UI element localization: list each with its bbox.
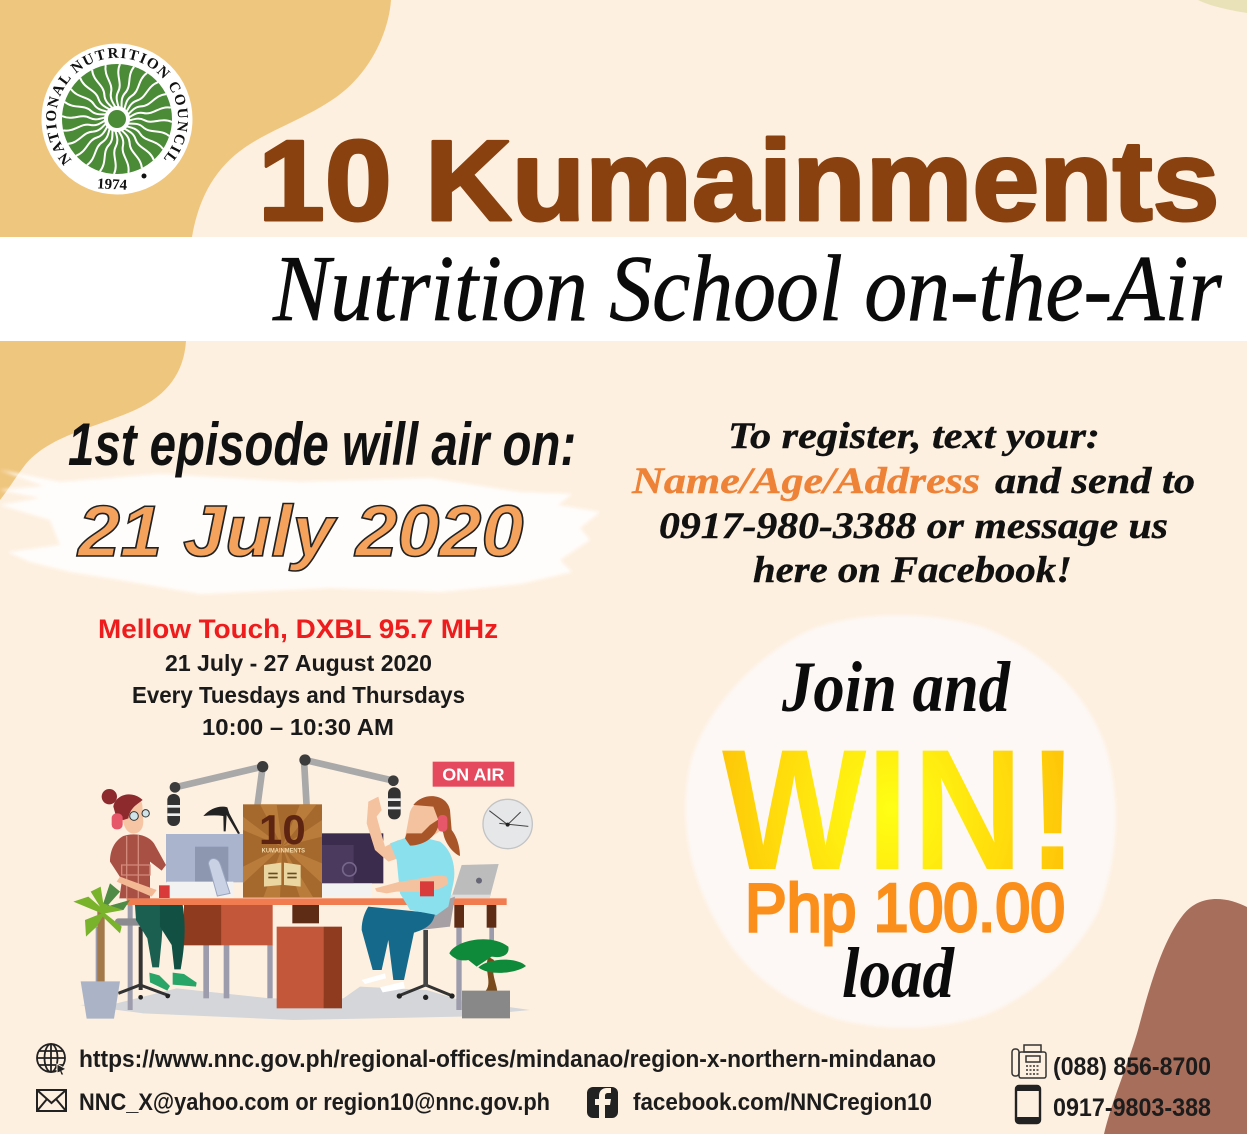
laptop — [427, 864, 499, 898]
text: load: load — [842, 933, 955, 1013]
right microphone — [299, 754, 401, 819]
icon: globe — [37, 1044, 66, 1075]
schedule text block: 21 July - 27 August 2020 — [165, 650, 432, 676]
registration instructions: Name/Age/Address — [631, 461, 980, 502]
text: WIN!: N — [912, 714, 1023, 906]
mobile number: 0917-9803-388 — [1053, 1094, 1211, 1122]
shape: top-right corner tint — [1198, 0, 1247, 13]
email: NNC_X@yahoo.com or region10@nnc.gov.ph — [79, 1089, 550, 1116]
woman host — [102, 789, 197, 1000]
icon: envelope — [37, 1090, 66, 1111]
registration instructions: To register, text your: — [728, 416, 1100, 457]
ON AIR sign: ON AIR — [442, 765, 504, 785]
shape: lower-left tan blob — [0, 341, 186, 500]
registration instructions: and send to — [995, 461, 1195, 502]
website: https://www.nnc.gov.ph/regional-offices/mindanao/region-x-northern-mindanao — [79, 1046, 936, 1073]
text: WIN!: W — [722, 714, 867, 906]
text: Join and: Join and — [781, 647, 1011, 727]
registration instructions: here on Facebook! — [753, 550, 1072, 591]
footer contacts — [37, 1044, 1211, 1123]
floor shadow — [80, 987, 530, 1020]
text: WIN!: I — [866, 714, 909, 906]
left microphone — [167, 761, 268, 826]
icon: facebook — [587, 1087, 618, 1118]
prize badge: Join and WIN — [686, 615, 1116, 1028]
logo: National Nutrition Council: 1974 — [97, 176, 128, 194]
left monitor — [166, 834, 243, 897]
ON AIR sign — [433, 762, 514, 787]
brush stroke behind date — [0, 470, 600, 594]
wall clock — [483, 799, 532, 849]
text: WIN!: ! — [1027, 714, 1078, 906]
shape: bottom-right brown blob — [1104, 899, 1247, 1134]
poster: 10 Kumainments — [243, 804, 322, 898]
desk lamp — [203, 807, 240, 834]
bonsai tree — [449, 939, 526, 1018]
illustration: radio studio — [73, 754, 532, 1020]
title: 10 Kumainments: 10 Kumainments — [258, 117, 1219, 244]
schedule text block: Mellow Touch, DXBL 95.7 MHz — [98, 614, 498, 644]
icon: mobile phone — [1016, 1086, 1040, 1123]
shape: top-left tan blob — [0, 0, 391, 237]
logo: National Nutrition Council: NATIONAL NUTRITION COUNCIL — [46, 48, 188, 166]
white title band — [0, 237, 1247, 341]
desk — [96, 898, 507, 1010]
facebook page: facebook.com/NNCregion10 — [633, 1089, 932, 1116]
potted palm plant — [73, 883, 130, 1019]
poster: 10 Kumainments: KUMAINMENTS — [262, 848, 305, 854]
poster: 10 Kumainments: 10 — [259, 806, 306, 853]
text: Php 100.00: Php 100.00 — [745, 870, 1065, 946]
brushed white circle — [686, 615, 1116, 1028]
schedule text block: 10:00 – 10:30 AM — [202, 714, 394, 740]
schedule text block — [98, 614, 498, 740]
icon: telephone — [1012, 1045, 1046, 1078]
man host — [362, 796, 460, 1000]
heading: 1st episode will air on: 1st episode will air on: — [68, 412, 576, 478]
right monitor — [322, 833, 383, 897]
subtitle: Nutrition School on-the-Air: Nutrition School on-the-Air — [272, 237, 1223, 341]
date: 21 July 2020: 21 July 2020 — [76, 491, 524, 572]
registration instructions — [631, 416, 1195, 591]
schedule text block: Every Tuesdays and Thursdays — [132, 682, 465, 708]
phone number: (088) 856-8700 — [1053, 1053, 1211, 1081]
registration instructions: 0917-980-3388 or message us — [659, 506, 1168, 547]
